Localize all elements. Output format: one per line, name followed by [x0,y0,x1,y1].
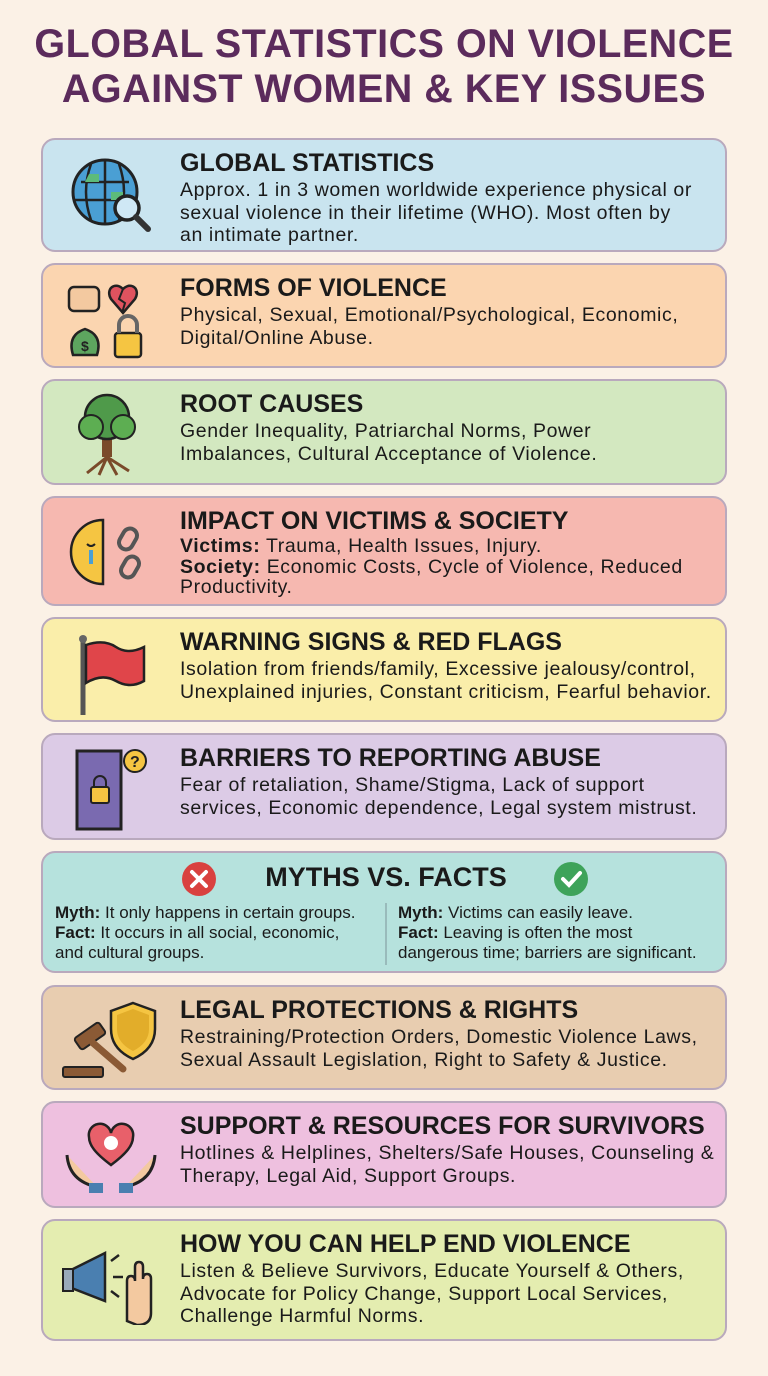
icon: green check [554,862,588,896]
panel: support & resources: Therapy, Legal Aid, Support Groups. [180,1164,516,1186]
panel: global statistics: GLOBAL STATISTICS [180,149,434,177]
icon: locked door with question mark [76,749,147,830]
panel: how you can help: Advocate for Policy Change, Support Local Services, [180,1282,668,1304]
panel: myths vs facts [41,851,727,973]
panel: legal protections: LEGAL PROTECTIONS & RIGHTS [180,996,578,1024]
panel: barriers [41,733,727,840]
title [34,22,734,111]
panel: warning signs: Unexplained injuries, Constant criticism, Fearful behavior. [180,680,712,702]
panel: global statistics [41,138,727,252]
panel: forms of violence: Digital/Online Abuse. [180,326,374,348]
icon: globe with magnifier [72,158,151,232]
panel: legal protections [41,985,727,1090]
title: AGAINST WOMEN & KEY ISSUES [62,67,706,111]
panel: support & resources [41,1101,727,1208]
panel: forms of violence: FORMS OF VIOLENCE [180,274,447,302]
panel: impact: Victims: Trauma, Health Issues, Injury. [180,535,542,557]
title: GLOBAL STATISTICS ON VIOLENCE [34,22,734,66]
panel: impact: Society: Economic Costs, Cycle of Violence, Reduced [180,556,683,578]
panel: support & resources: SUPPORT & RESOURCES FOR SURVIVORS [180,1112,705,1140]
panel: forms of violence: Physical, Sexual, Emotional/Psychological, Economic, [180,304,678,326]
icon: megaphone and raised hand [62,1251,152,1325]
icon: gavel and shield [62,1002,156,1078]
icon: hands holding heart [66,1122,156,1193]
panel: support & resources: Hotlines & Helplines, Shelters/Safe Houses, Counseling & [180,1142,714,1164]
panel: warning signs: Isolation from friends/family, Excessive jealousy/control, [180,658,696,680]
panel: how you can help: Listen & Believe Survivors, Educate Yourself & Others, [180,1260,684,1282]
panel: warning signs [41,617,727,722]
panel: legal protections: Restraining/Protection Orders, Domestic Violence Laws, [180,1026,698,1048]
panel: impact: Productivity. [180,576,293,598]
panel: impact: IMPACT ON VICTIMS & SOCIETY [180,507,568,535]
panel: root causes: ROOT CAUSES [180,390,363,418]
panel: warning signs: WARNING SIGNS & RED FLAGS [180,628,562,656]
panel: how you can help: Challenge Harmful Norms. [180,1305,424,1327]
myth 1 [55,903,356,962]
icon: locked door with question mark: ? [130,754,140,771]
myth 1: Fact: It occurs in all social, economic, [55,923,339,942]
panel: global statistics: an intimate partner. [180,224,359,246]
panel: root causes: Imbalances, Cultural Acceptance of Violence. [180,442,597,464]
myth 2: Fact: Leaving is often the most [398,923,632,942]
icon: fist, heart, money, lock [68,284,142,358]
myth 2 [398,903,697,962]
panel: how you can help: HOW YOU CAN HELP END VIOLENCE [180,1230,631,1258]
myth 1: Myth: It only happens in certain groups. [55,903,356,922]
panel: global statistics: sexual violence in their lifetime (WHO). Most often by [180,202,671,224]
panel: root causes [41,379,727,485]
heading: MYTHS VS. FACTS [265,862,507,892]
panel: barriers: services, Economic dependence, Legal system mistrust. [180,796,697,818]
myth 2: Myth: Victims can easily leave. [398,903,633,922]
panel: impact [41,496,727,606]
panel: how you can help [41,1219,727,1341]
icon: red flag [79,635,146,715]
panel: root causes: Gender Inequality, Patriarchal Norms, Power [180,420,591,442]
panel: barriers: BARRIERS TO REPORTING ABUSE [180,744,601,772]
icon: fist, heart, money, lock: $ [81,338,89,354]
panel: barriers: Fear of retaliation, Shame/Stigma, Lack of support [180,774,645,796]
panel: forms of violence [41,263,727,368]
icon: crying face and broken chain [70,518,141,586]
panel: legal protections: Sexual Assault Legislation, Right to Safety & Justice. [180,1048,668,1070]
icon: tree with roots [78,394,136,476]
myth 2: dangerous time; barriers are significant. [398,943,697,962]
myth 1: and cultural groups. [55,943,204,962]
icon: red x [182,862,216,896]
panel: global statistics: Approx. 1 in 3 women worldwide experience physical or [180,179,692,201]
